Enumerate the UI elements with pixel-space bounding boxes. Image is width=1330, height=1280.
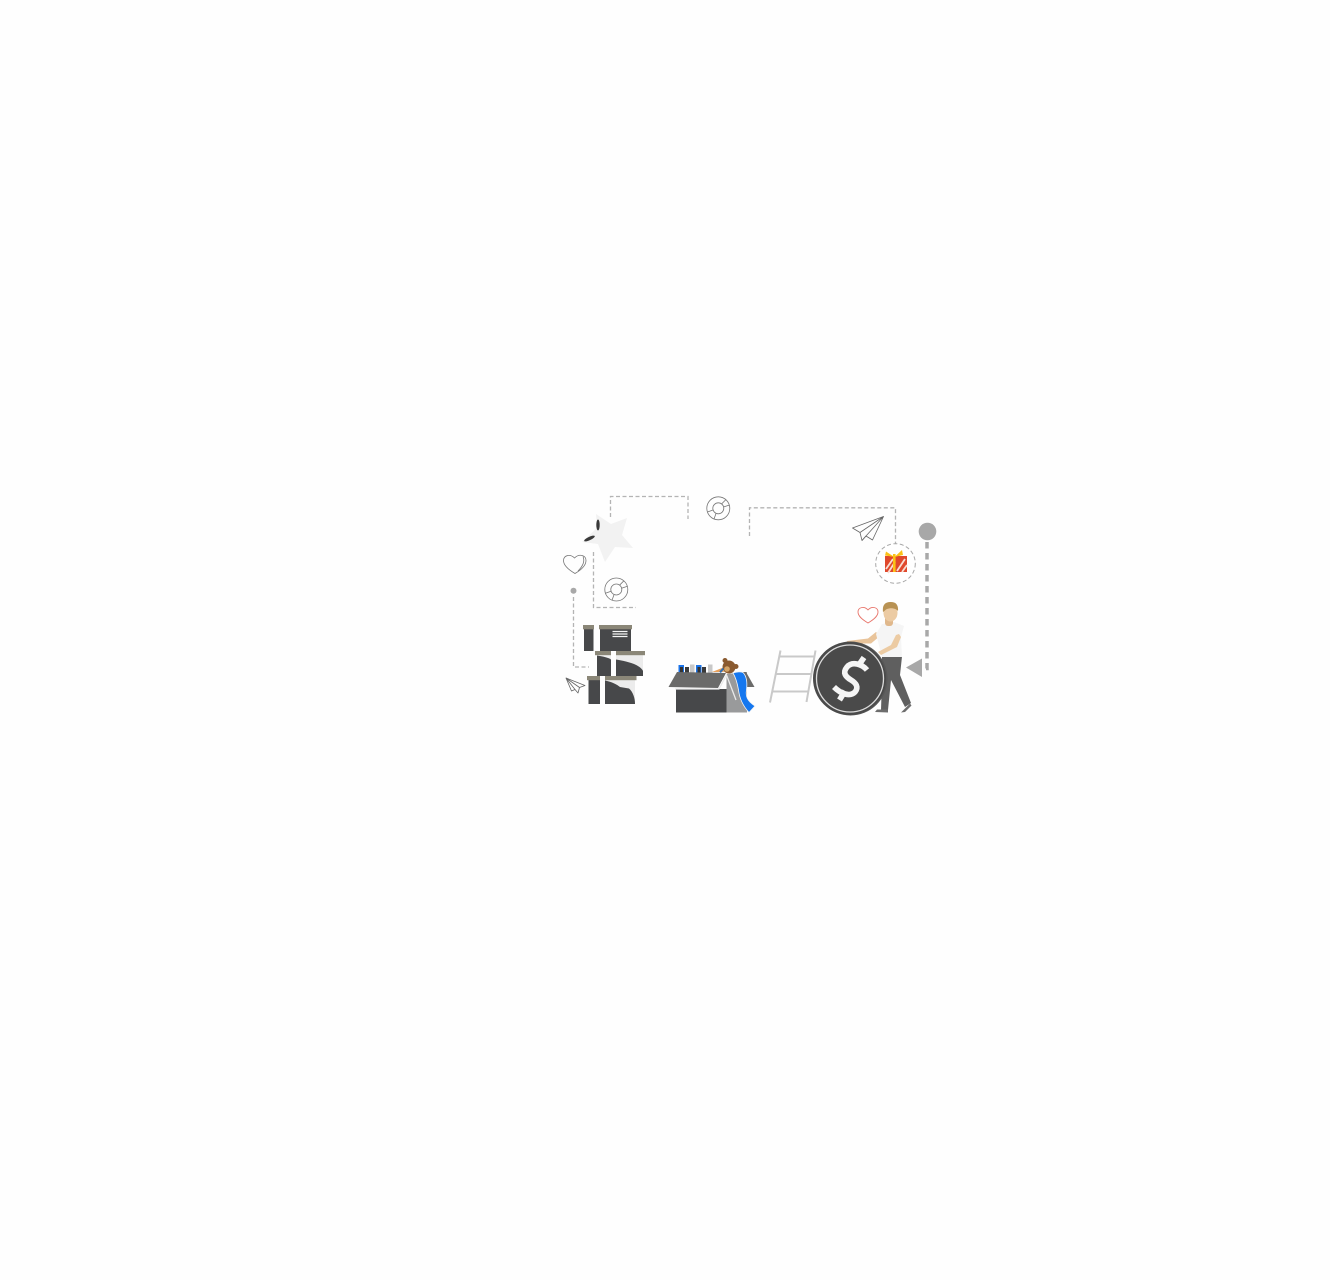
gift box (885, 556, 907, 572)
box front (676, 689, 726, 712)
box white edges (675, 675, 736, 700)
box right side (726, 672, 747, 712)
person (847, 602, 912, 712)
icon: donut top (707, 497, 730, 520)
person: legs (881, 656, 911, 710)
icon: donut lower (605, 578, 628, 601)
teddy bear (712, 658, 738, 674)
box stack: top box (583, 625, 632, 651)
icon: star (582, 514, 633, 562)
open box with toys (668, 658, 755, 712)
icon: gift in dashed circle (876, 544, 915, 583)
box stack: middle box (595, 651, 645, 676)
icon: paper plane top right (852, 516, 884, 540)
person: torso (876, 622, 904, 657)
blue ribbon (733, 672, 755, 712)
box stack: bottom box (587, 676, 636, 704)
icon: paper plane lower left (566, 678, 585, 693)
gift ribbon (893, 554, 896, 572)
person: near arm (878, 634, 901, 655)
person: far arm (847, 632, 880, 644)
box lid left (668, 672, 726, 688)
coin with dollar sign (813, 642, 888, 716)
person: head (883, 602, 898, 626)
icon: heart outline (564, 555, 586, 574)
icon: heart red (858, 607, 878, 623)
toys in box (678, 664, 712, 673)
ladder (770, 650, 816, 702)
dashed path: top right bracket (750, 508, 896, 544)
dashed path: left connector to boxes (570, 588, 589, 667)
dollar symbol (834, 658, 867, 700)
box lid right (738, 672, 754, 687)
thick dashed arrow line (906, 523, 936, 677)
dashed path: top left bracket (610, 496, 688, 519)
stacked boxes (583, 625, 645, 704)
person: shoes (875, 704, 912, 712)
dashed path: left bracket under star (594, 552, 636, 608)
